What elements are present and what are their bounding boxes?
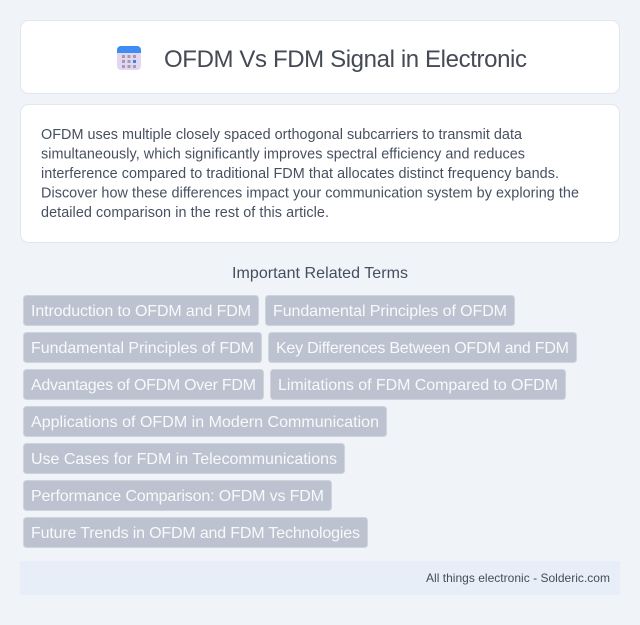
icon: calendar: [117, 46, 141, 70]
tag: principles of OFDM: Fundamental Principles of OFDM: [273, 303, 507, 320]
tag: future trends: Future Trends in OFDM and FDM Technologies: [31, 525, 360, 542]
tag: limitations: [270, 370, 566, 400]
tag: performance: Performance Comparison: OFDM vs FDM: [31, 488, 324, 505]
title: OFDM Vs FDM Signal in Electronic: [164, 46, 527, 73]
tag: introduction: [24, 296, 258, 326]
tag: key differences: Key Differences Between OFDM and FDM: [276, 340, 569, 357]
panel: intro paragraph: [20, 104, 620, 242]
tag: use cases: Use Cases for FDM in Telecommunications: [31, 451, 337, 468]
text block: intro: OFDM uses multiple closely spaced orthogonal subcarriers to transmit data: [41, 127, 522, 143]
tag: key differences: [268, 332, 576, 362]
panel: header: [20, 20, 620, 94]
tag: limitations: Limitations of FDM Compared to OFDM: [278, 377, 558, 394]
heading: related terms: Important Related Terms: [232, 265, 408, 282]
tag: principles of FDM: [24, 332, 262, 362]
tag: advantages: Advantages of OFDM Over FDM: [31, 377, 256, 394]
panel: related term tags: [24, 296, 576, 548]
footer: All things electronic - Solderic.com: [426, 571, 610, 585]
text block: intro: Discover how these differences impact your communication system by exploring the: [41, 186, 579, 202]
tag: advantages: [24, 370, 264, 400]
text block: intro: interference compared to traditional FDM that allocates distinct frequency bands.: [41, 166, 559, 182]
tag: use cases: [24, 444, 344, 474]
text block: intro: detailed comparison in the rest of this article.: [41, 205, 329, 221]
tag: applications: Applications of OFDM in Modern Communication: [31, 414, 379, 431]
tag: introduction: Introduction to OFDM and FDM: [31, 303, 251, 320]
tag: principles of FDM: Fundamental Principles of FDM: [31, 340, 254, 357]
tag: future trends: [24, 518, 368, 548]
text block: intro: [41, 127, 579, 221]
text block: intro: simultaneously, which significantly improves spectral efficiency and reduces: [41, 146, 525, 162]
tag: performance: [24, 480, 332, 510]
tag: applications: [24, 406, 386, 436]
footer: [20, 561, 620, 595]
tag: principles of OFDM: [266, 296, 514, 326]
